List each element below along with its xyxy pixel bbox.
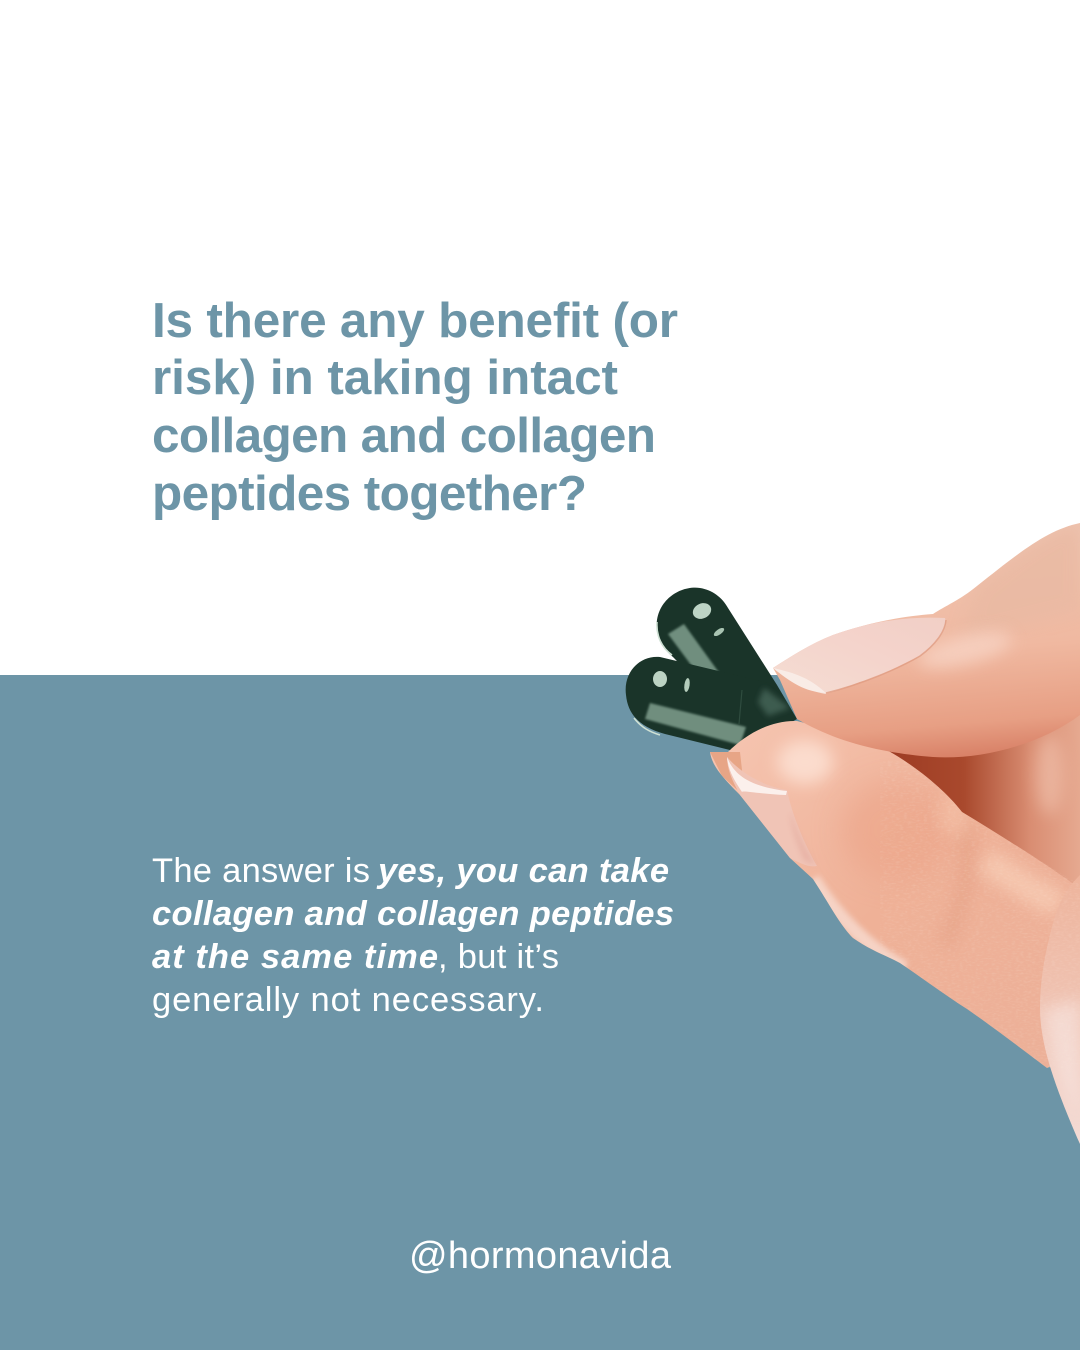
answer text: at the same time (152, 938, 438, 976)
answer text (152, 852, 674, 1019)
answer text: yes, you can take (376, 852, 669, 890)
hand: gap between fingers (880, 700, 1080, 905)
heading: risk) in taking intact (152, 350, 618, 405)
answer text: collagen and collagen peptides (152, 895, 674, 933)
capsule: front (626, 657, 797, 752)
heading: Is there any benefit (or (152, 293, 678, 348)
hand: index finger (773, 523, 1080, 757)
heading (152, 293, 678, 521)
answer text: The answer is (152, 852, 370, 890)
answer text: , but it’s (438, 938, 559, 976)
answer text: generally not necessary. (152, 981, 544, 1019)
hand: index fingernail (773, 618, 946, 694)
panel: blue lower background (0, 675, 1080, 1350)
handle: @hormonavida (409, 1235, 672, 1277)
heading: collagen and collagen (152, 408, 656, 463)
hand: skin texture (880, 760, 1080, 1070)
hand: third finger (1040, 875, 1080, 1144)
heading: peptides together? (152, 466, 587, 521)
hand: thumbnail (727, 757, 817, 866)
illustration: hand holding two capsules (626, 523, 1080, 1144)
capsule: rear (657, 588, 777, 695)
hand: thumb (710, 721, 1075, 1068)
